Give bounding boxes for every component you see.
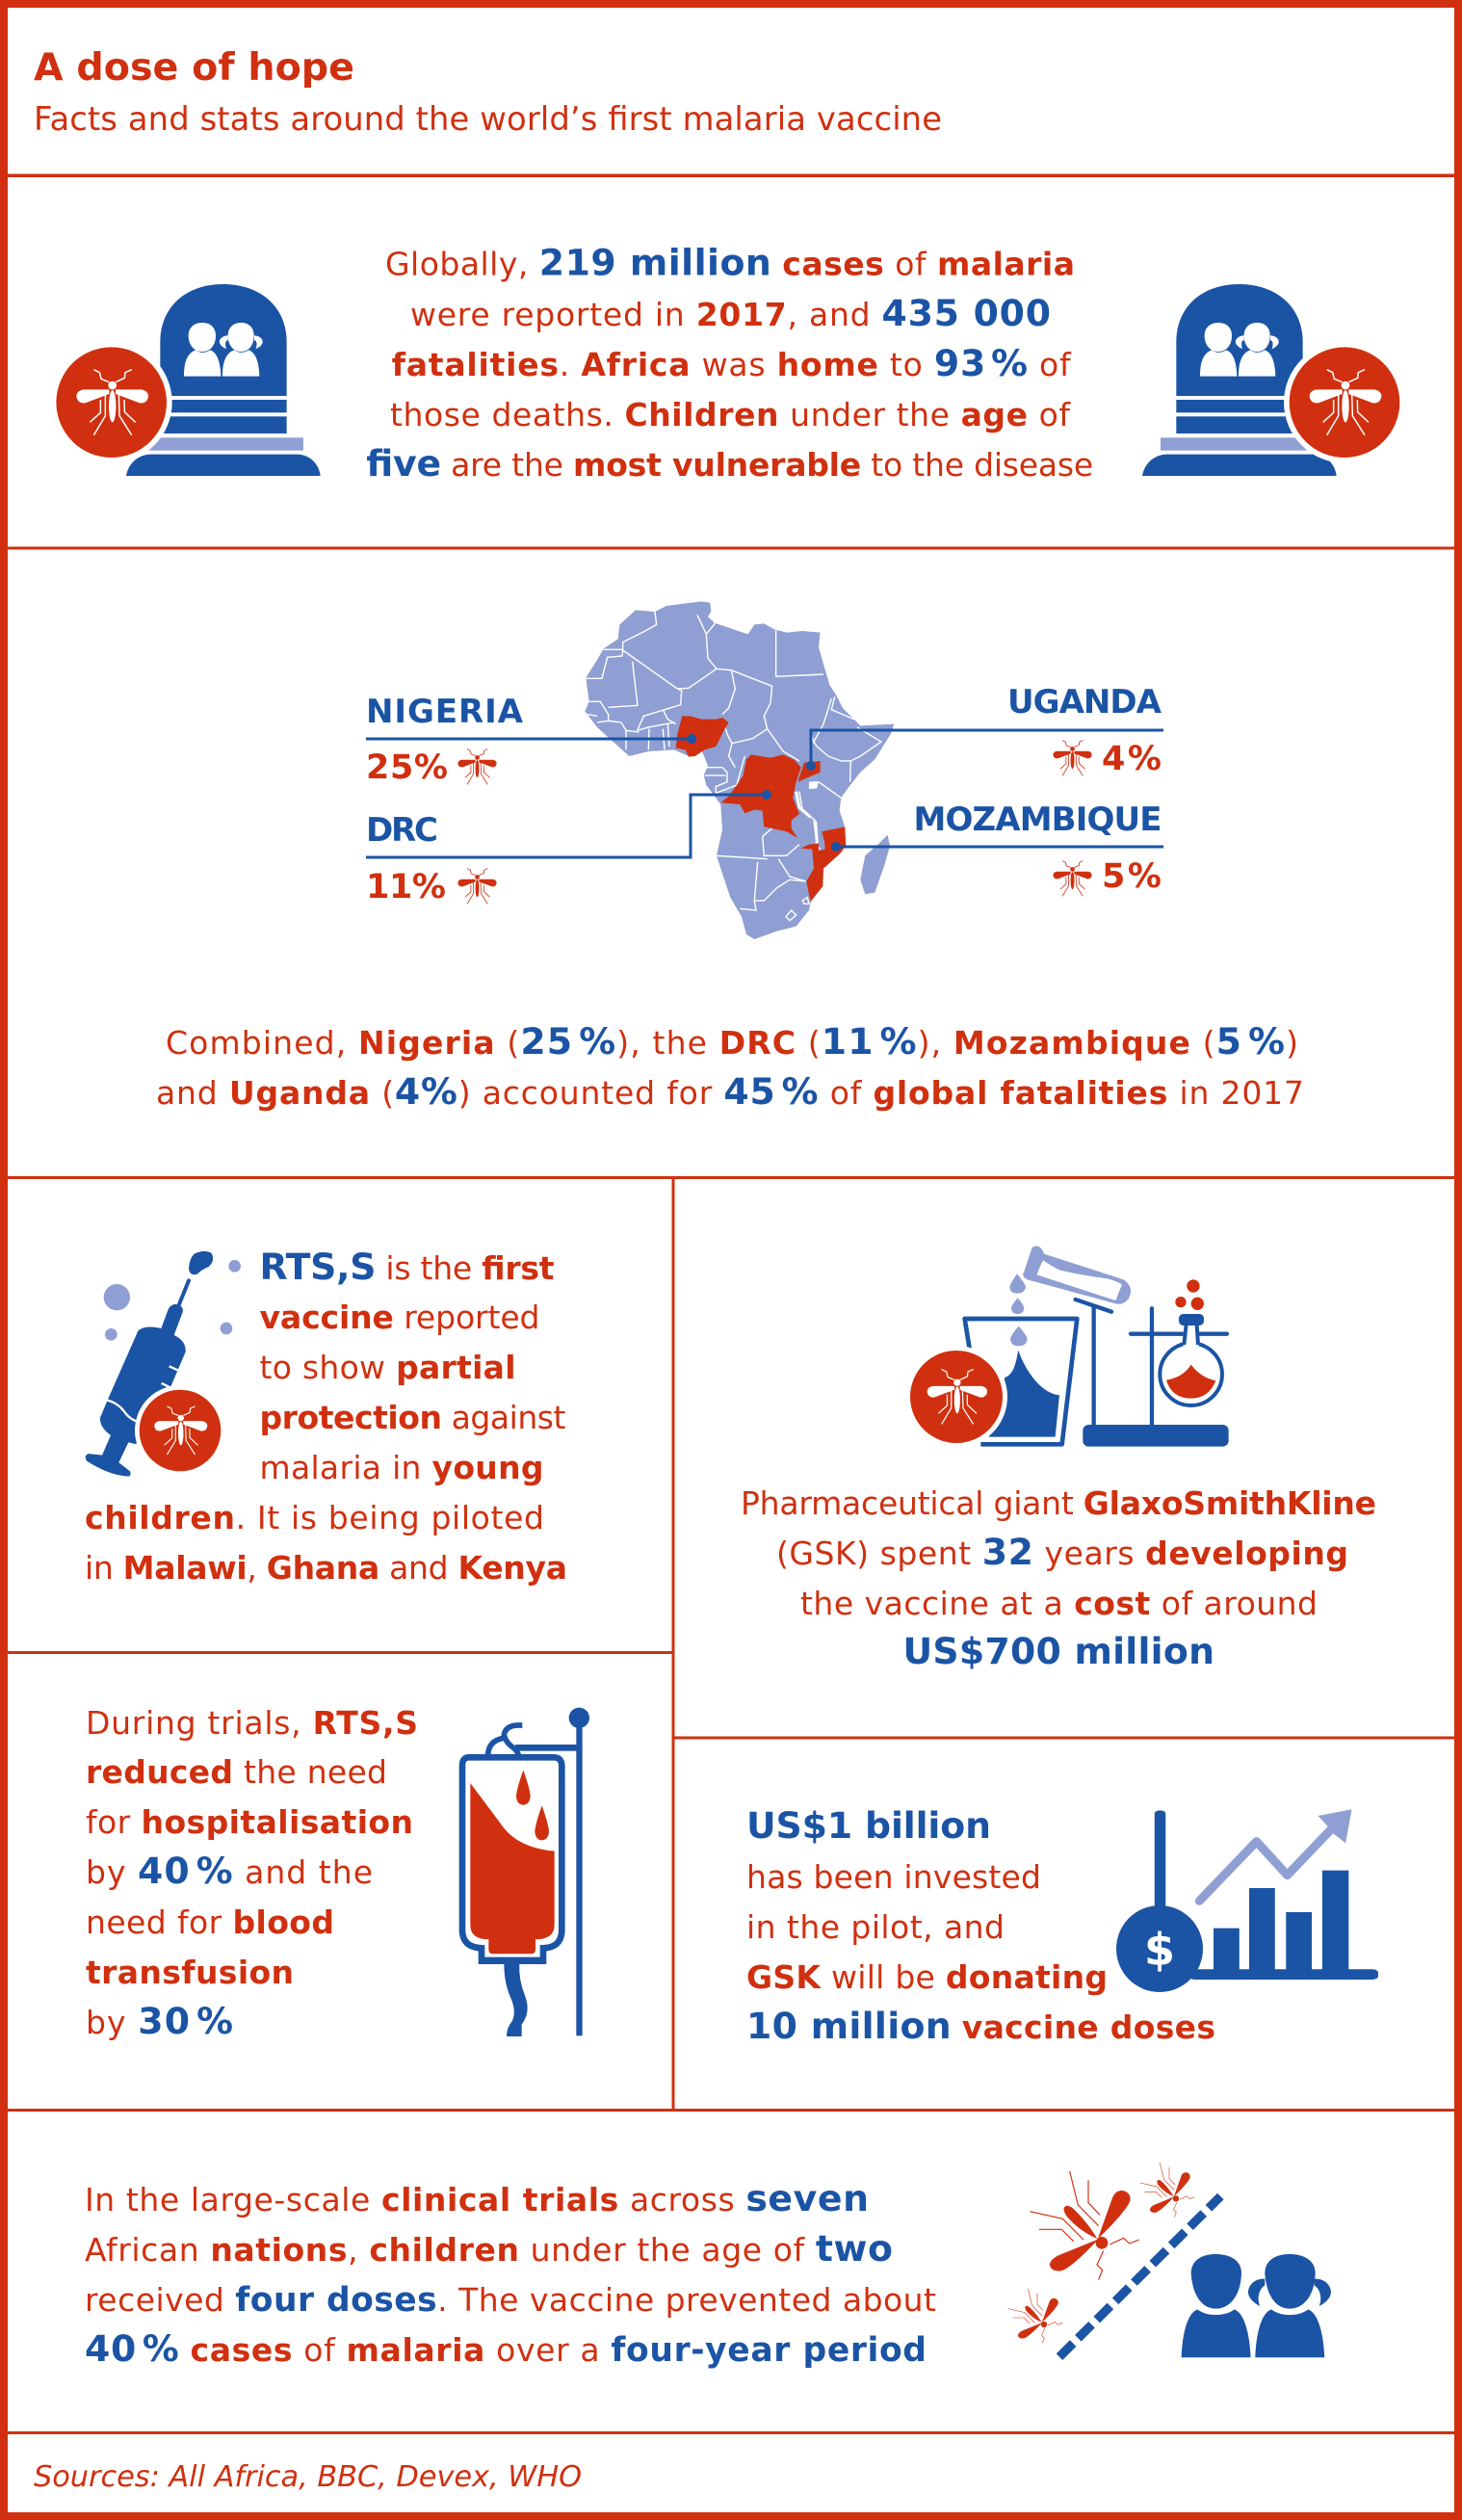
text block: GSK: US$700 million	[903, 1630, 1214, 1672]
panel: RTS,S vaccine	[85, 1246, 567, 1587]
text block: investment: has been invested	[746, 1858, 1041, 1896]
map of Africa	[585, 601, 894, 939]
icon: lab equipment	[905, 1246, 1229, 1448]
panel: clinical trials	[85, 2163, 1331, 2370]
text block: trials: by 40% and the	[86, 1850, 373, 1892]
icon: blood bag	[462, 1708, 589, 2036]
text block: GSK: Pharmaceutical giant GlaxoSmithKline	[741, 1484, 1376, 1522]
Nigeria	[676, 716, 729, 757]
text block: RTS,S: RTS,S is the first	[260, 1246, 555, 1288]
text block: GSK: (GSK) spent 32 years developing	[776, 1531, 1348, 1573]
text block: trials	[86, 1704, 418, 2042]
text block: GSK	[741, 1484, 1376, 1672]
text block: clinical trials: In the large-scale clinical trials across seven	[85, 2177, 869, 2219]
icon: mosquitoes behind a barrier and children	[1008, 2163, 1331, 2357]
text block: combined share	[156, 1020, 1304, 1113]
text block: GSK: the vaccine at a cost of around	[800, 1585, 1318, 1622]
text block: RTS,S: children. It is being piloted	[85, 1499, 544, 1536]
icon: dollar coin and growth chart	[1116, 1809, 1378, 1992]
title: A dose of hope	[34, 45, 354, 90]
text block: global figures: fatalities. Africa was home to 93% of	[392, 342, 1072, 384]
text block: RTS,S: in Malawi, Ghana and Kenya	[85, 1549, 567, 1587]
Mozambique	[801, 827, 846, 902]
text block: trials: During trials, RTS,S	[86, 1704, 418, 1742]
panel: Africa map	[156, 601, 1304, 1113]
text block: clinical trials: 40% cases of malaria over a four-year period	[85, 2327, 927, 2370]
icon: gravestone with mosquito, left	[51, 284, 321, 476]
text block: trials: transfusion	[86, 1954, 294, 1991]
DRC callout: 11%	[366, 868, 446, 906]
text block: combined share: and Uganda (4%) accounted for 45% of global fatalities in 2017	[156, 1070, 1304, 1113]
text block: RTS,S: protection against	[260, 1399, 566, 1436]
Mozambique callout	[831, 801, 1163, 896]
text block: RTS,S: vaccine reported	[260, 1299, 539, 1336]
Mozambique callout: MOZAMBIQUE	[913, 801, 1162, 839]
text block: clinical trials: received four doses. The vaccine prevented about	[85, 2281, 936, 2320]
sources: Sources: All Africa, BBC, Devex, WHO	[34, 2460, 582, 2494]
subtitle: Facts and stats around the world’s first malaria vaccine	[34, 100, 942, 138]
text block: investment: US$1 billion	[746, 1804, 991, 1847]
text block: global figures	[366, 241, 1093, 485]
text block: clinical trials	[85, 2177, 936, 2370]
text block: trials: need for blood	[86, 1903, 334, 1941]
text block: global figures: five are the most vulnerable to the disease	[366, 442, 1093, 485]
text block: investment	[746, 1804, 1215, 2047]
text block: trials: by 30%	[86, 2000, 233, 2042]
text block: clinical trials: African nations, children under the age of two	[85, 2227, 893, 2270]
text block: RTS,S: to show partial	[260, 1349, 516, 1386]
Nigeria callout: 25%	[366, 748, 448, 787]
DRC callout: DRC	[366, 811, 438, 850]
Nigeria callout: NIGERIA	[366, 693, 524, 731]
text block: global figures: Globally, 219 million cases of malaria	[385, 241, 1075, 283]
Uganda callout: UGANDA	[1007, 683, 1162, 722]
Nigeria callout	[366, 693, 696, 787]
icon: dollar coin and growth chart: $	[1144, 1924, 1175, 1976]
Mozambique callout: 5%	[1102, 857, 1162, 896]
text block: combined share: Combined, Nigeria (25%), the DRC (11%), Mozambique (5%)	[166, 1020, 1298, 1063]
DRC	[720, 754, 801, 838]
Uganda callout	[806, 683, 1163, 778]
Uganda	[797, 761, 821, 782]
text block: investment: GSK will be donating	[746, 1958, 1108, 1996]
text block: investment: in the pilot, and	[746, 1908, 1005, 1946]
text block: global figures: were reported in 2017, and 435 000	[410, 292, 1051, 334]
text block: RTS,S	[85, 1246, 567, 1587]
panel: global burden	[51, 241, 1405, 485]
Uganda callout: 4%	[1102, 740, 1162, 778]
text block: trials: for hospitalisation	[86, 1803, 413, 1841]
icon: gravestone with mosquito, right	[1142, 284, 1405, 476]
text block: global figures: those deaths. Children under the age of	[390, 396, 1071, 433]
panel: investment	[746, 1804, 1378, 2047]
icon: syringe	[86, 1251, 241, 1477]
text block: RTS,S: malaria in young	[260, 1449, 543, 1486]
panel: GSK development	[741, 1246, 1376, 1672]
text block: investment: 10 million vaccine doses	[746, 2005, 1215, 2047]
text block: trials: reduced the need	[86, 1753, 387, 1791]
DRC callout	[366, 790, 771, 906]
panel: trial results	[86, 1704, 589, 2042]
